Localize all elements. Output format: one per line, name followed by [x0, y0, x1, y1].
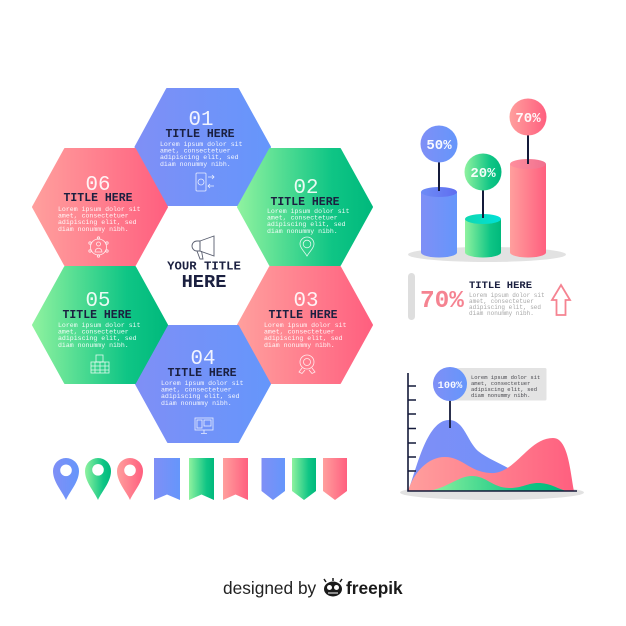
icon: megaphone [192, 236, 214, 259]
stat callout 70%: TITLE HERE [469, 280, 532, 292]
hexagon 05: adipiscing elit, sed [58, 335, 137, 342]
hexagon 02: amet, consectetuer [267, 215, 338, 222]
hexagon 02: Lorem ipsum dolor sit [267, 208, 350, 215]
hexagon 05: amet, consectetuer [58, 329, 129, 336]
hexagon 03: 03 [294, 290, 318, 313]
hexagon 06 [33, 149, 167, 265]
hexagon 03: adipiscing elit, sed [264, 335, 343, 342]
hexagon 04: adipiscing elit, sed [161, 393, 240, 400]
marker 100%: 100% [438, 380, 463, 392]
stat callout 70%: 70% [420, 288, 464, 315]
hexagon 01: Lorem ipsum dolor sit [160, 141, 243, 148]
cylinder bar chart [408, 98, 566, 262]
bar: 50%: 50% [426, 138, 452, 154]
hexagon 05: TITLE HERE [62, 309, 132, 322]
bar: 70% [510, 98, 546, 258]
bar: 20% [464, 154, 502, 258]
hexagon 06: amet, consectetuer [58, 213, 129, 220]
hexagon 05: Lorem ipsum dolor sit [58, 322, 141, 329]
hexagon 04 [136, 326, 270, 442]
hexagon 04: diam nonummy nibh. [161, 400, 232, 407]
marker 100% [433, 367, 467, 428]
hexagon 05: 05 [86, 290, 110, 313]
note box: amet, consectetuer [471, 380, 530, 387]
center title: YOUR TITLE [167, 260, 241, 274]
hexagon 02: adipiscing elit, sed [267, 221, 346, 228]
hexagon 02: 02 [294, 177, 318, 200]
hexagon 04: TITLE HERE [167, 367, 237, 380]
area: blue [408, 420, 535, 491]
hexagon 06: Lorem ipsum dolor sit [58, 206, 141, 213]
bar: 20%: 20% [470, 166, 496, 182]
icon: phone with arrows [196, 173, 214, 191]
note box: diam nonummy nibh. [471, 392, 530, 399]
hexagon 03: diam nonummy nibh. [264, 342, 335, 349]
icon: award badge [299, 355, 315, 374]
hexagon 06: diam nonummy nibh. [58, 226, 129, 233]
stat callout 70%: adipiscing elit, sed [469, 304, 541, 311]
footer credit: designed by [223, 578, 317, 598]
hexagon 04: 04 [191, 348, 215, 371]
note box: Lorem ipsum dolor sit [471, 374, 540, 381]
icon: buildings [91, 355, 109, 373]
footer credit [223, 578, 403, 598]
area: pink [408, 438, 574, 491]
hexagon 05 [33, 267, 167, 383]
icon: computer monitor [195, 418, 213, 434]
hexagon 02: TITLE HERE [270, 196, 340, 209]
bar: 70%: 70% [515, 111, 541, 127]
hexagon 05: diam nonummy nibh. [58, 342, 129, 349]
hexagon 01: diam nonummy nibh. [160, 161, 231, 168]
area: green [428, 476, 566, 491]
bar: 50% [420, 126, 458, 258]
hexagon 01 [136, 89, 270, 205]
hexagon 01: 01 [189, 109, 213, 132]
stat callout 70%: diam nonummy nibh. [469, 310, 534, 317]
hexagon 03: TITLE HERE [268, 309, 338, 322]
icon: people network [89, 237, 108, 257]
icon: up arrow [552, 285, 570, 315]
area chart [400, 367, 584, 500]
center title: HERE [182, 271, 226, 293]
hexagon 01: adipiscing elit, sed [160, 154, 239, 161]
hexagon 01: TITLE HERE [165, 128, 235, 141]
notched banners row [154, 458, 248, 500]
hexagon 06: 06 [86, 174, 110, 197]
hexagon 03: amet, consectetuer [264, 329, 335, 336]
map pins row [53, 458, 143, 500]
hexagon 01: amet, consectetuer [160, 148, 231, 155]
hexagon 02 [238, 149, 372, 265]
hexagon 06: TITLE HERE [63, 192, 133, 205]
hexagon 04: amet, consectetuer [161, 387, 232, 394]
icon: freepik mascot [324, 578, 342, 596]
axis [408, 373, 577, 491]
stat callout 70%: Lorem ipsum dolor sit [469, 292, 545, 299]
footer credit: freepik [346, 578, 403, 598]
stat callout 70%: amet, consectetuer [469, 298, 534, 305]
hexagon 06: adipiscing elit, sed [58, 219, 137, 226]
note box: adipiscing elit, sed [471, 386, 537, 393]
hexagon 03 [238, 267, 372, 383]
stat callout 70% [408, 273, 570, 320]
pointed shields row [262, 458, 347, 500]
hexagon 02: diam nonummy nibh. [267, 228, 338, 235]
icon: location pin [300, 237, 314, 256]
hexagon 04: Lorem ipsum dolor sit [161, 380, 244, 387]
note box [450, 368, 546, 400]
center title [167, 236, 241, 293]
hexagon 03: Lorem ipsum dolor sit [264, 322, 347, 329]
